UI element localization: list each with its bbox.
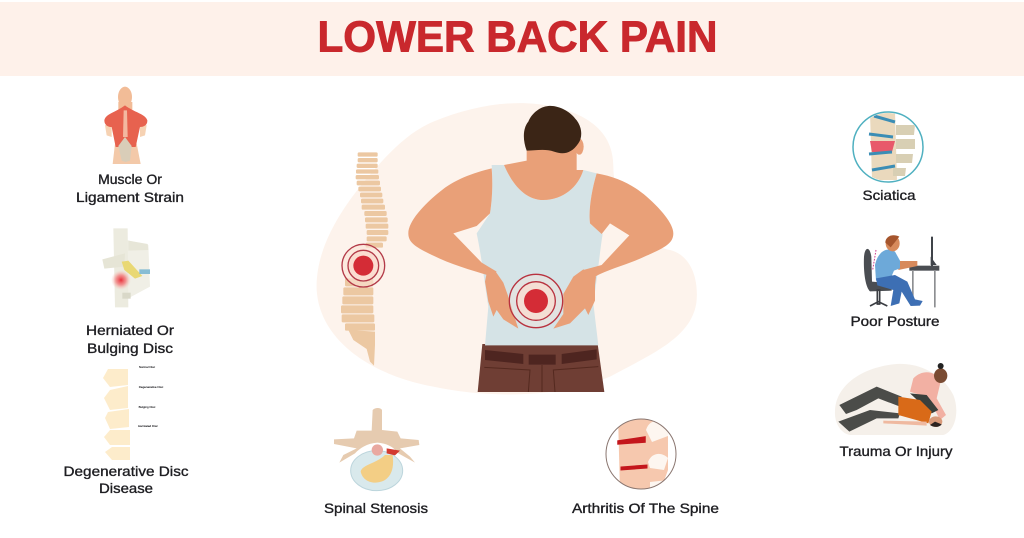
icon: vertebra cross-section: [334, 408, 419, 491]
right hand: [553, 269, 596, 329]
label: Arthritis Of The Spine: [572, 500, 719, 516]
man figure: [408, 106, 673, 392]
icon: disc stack: [103, 369, 130, 460]
left hand: [485, 271, 518, 329]
label: Poor Posture: [850, 313, 940, 329]
item: degenerative disc disease: [64, 365, 188, 496]
item: degenerative disc disease: Disease: [99, 480, 153, 496]
title: LOWER BACK PAIN: [318, 12, 718, 62]
tiny labels: Degenerative Disc: [139, 385, 164, 389]
label: Muscle Or: [98, 171, 162, 187]
label: Trauma Or Injury: [840, 443, 952, 459]
lower back pain marker: [509, 274, 563, 328]
item: sciatica: [853, 112, 923, 203]
trousers: [478, 344, 604, 392]
ear: [575, 139, 584, 155]
tiny labels: [138, 365, 164, 428]
tiny labels: Normal Disc: [139, 365, 156, 369]
icon: sciatica spine circle: [853, 112, 923, 182]
label: Herniated Or: [86, 322, 174, 338]
central illustration: man with back pain: [317, 103, 697, 394]
item: trauma or injury: [835, 363, 956, 459]
left arm: [408, 168, 497, 276]
item: spinal stenosis: [324, 408, 428, 516]
icon: vertebra: [102, 228, 150, 307]
label: Spinal Stenosis: [324, 500, 428, 516]
icon: first aid scene: [835, 363, 956, 435]
hair: [524, 106, 581, 153]
item: muscle or ligament strain: [76, 87, 184, 205]
item: herniated or bulging disc: [86, 228, 174, 356]
icon: arthritic spine circle: [606, 415, 676, 492]
item: poor posture: [850, 235, 940, 329]
neck and shoulders: [504, 147, 583, 200]
tiny labels: Bulging Disc: [139, 405, 156, 409]
header band: [0, 2, 1024, 76]
spine pain marker: [342, 244, 385, 287]
tank top: [477, 165, 603, 345]
background blob: [317, 103, 697, 394]
item: muscle or ligament strain: Ligament Strain: [76, 189, 184, 205]
icon: back muscles: [104, 87, 147, 164]
tiny labels: Herniated Disc: [138, 424, 158, 428]
icon: person at desk: [864, 235, 939, 307]
label: Degenerative Disc: [64, 463, 188, 479]
right arm: [583, 173, 673, 277]
label: Sciatica: [862, 187, 916, 203]
item: arthritis of the spine: [572, 415, 719, 516]
small spine: [341, 152, 388, 366]
item: herniated or bulging disc: Bulging Disc: [87, 340, 173, 356]
